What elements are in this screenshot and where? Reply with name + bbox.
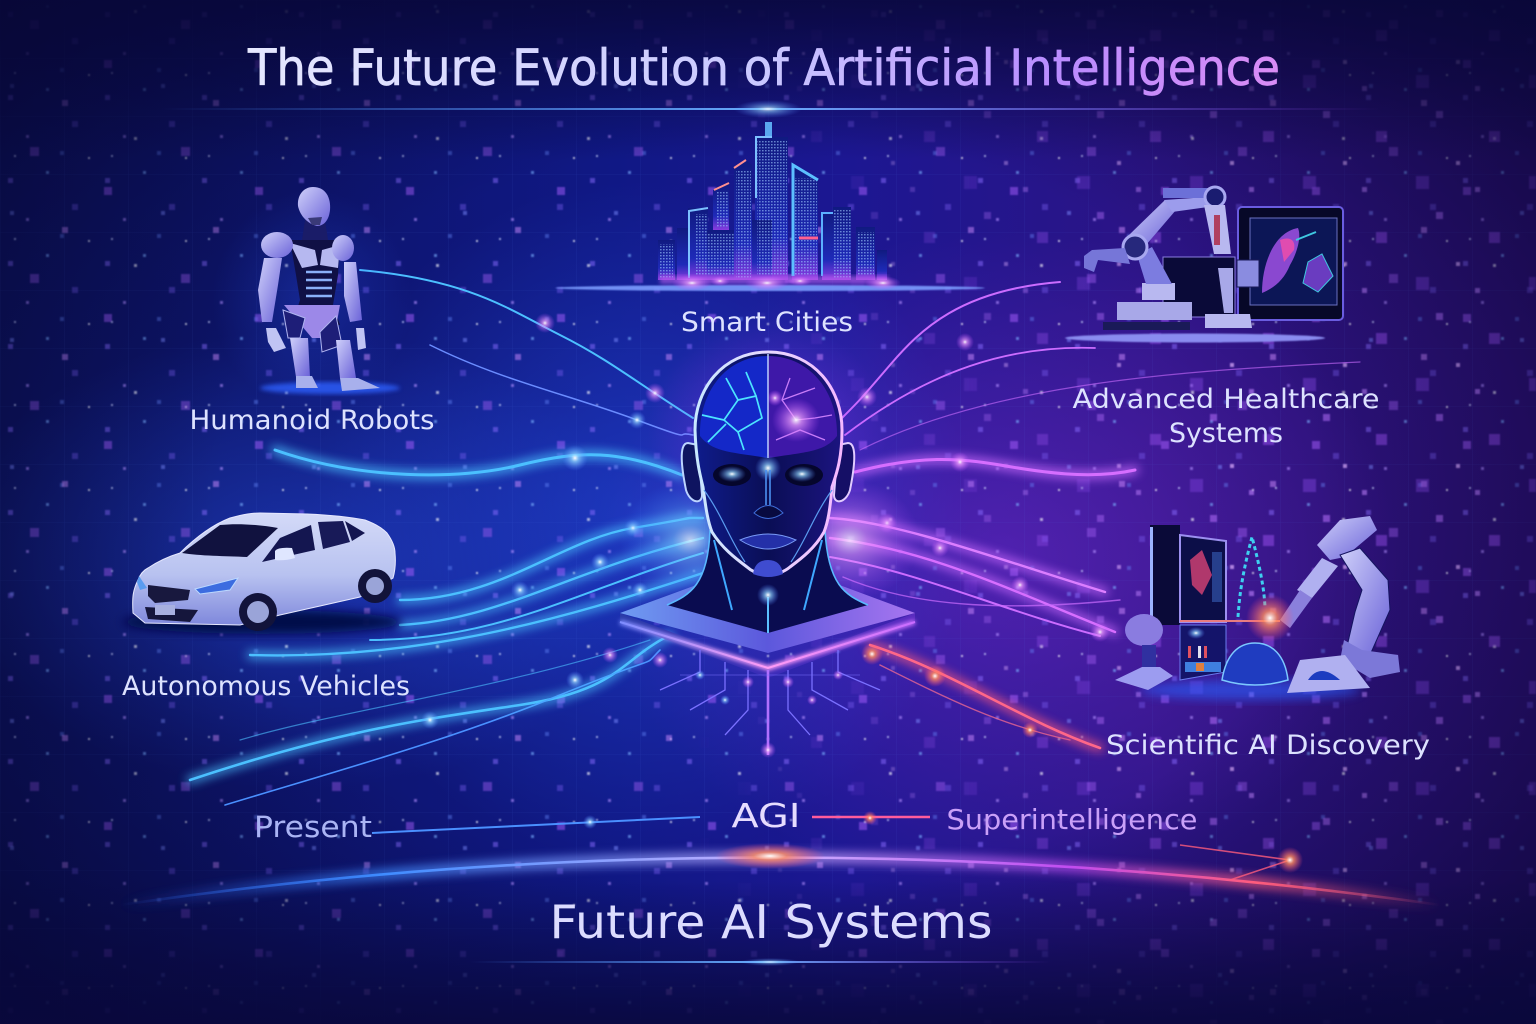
nose and mouth: [740, 470, 796, 549]
street lights: [660, 275, 901, 291]
icon: humanoid robot: [212, 187, 412, 410]
bottom underline: [470, 958, 1050, 966]
timeline label: AGI: AGI: [732, 796, 800, 835]
horizon arc with arrow: [120, 843, 1440, 905]
ears: [682, 443, 702, 501]
chest: [290, 243, 340, 268]
icon: science lab with robot arm: [1115, 516, 1400, 700]
robot arm: [1280, 516, 1400, 693]
timeline label: Present: Present: [254, 810, 372, 844]
platform: [620, 580, 915, 678]
label: Advanced Healthcare Systems: Systems: [1169, 418, 1283, 449]
icon: healthcare robot arm and monitor: [1065, 187, 1343, 342]
face: [695, 352, 842, 574]
label: Scientific AI Discovery: Scientific AI Discovery: [1106, 730, 1430, 761]
central AI head: [620, 320, 920, 678]
circuit traces below head: [660, 650, 880, 758]
connection lines: right purple and pink: [830, 282, 1360, 748]
cyan spire: [1238, 537, 1265, 617]
line nodes: [421, 313, 1110, 738]
label: Smart Cities: Smart Cities: [681, 307, 853, 338]
spark: [1180, 594, 1294, 642]
forehead light: [755, 455, 781, 481]
torso core: [290, 240, 340, 325]
connection lines: left blue: [190, 270, 703, 805]
arms: [258, 258, 282, 322]
monitor: [1238, 207, 1343, 320]
label: Autonomous Vehicles: Autonomous Vehicles: [122, 671, 410, 702]
robot arm: [1084, 187, 1259, 330]
dark cabinet: [1163, 257, 1235, 317]
microscope: [1115, 614, 1173, 690]
shoulders: [261, 232, 293, 258]
bright building edges: [689, 137, 833, 278]
timeline line: [372, 811, 930, 833]
buildings: [658, 122, 887, 280]
label: Advanced Healthcare Systems: Advanced Healthcare: [1072, 384, 1380, 415]
timeline label: Superintelligence: Superintelligence: [946, 803, 1198, 836]
heading: Future AI Systems: Future AI Systems: [550, 895, 992, 949]
head: [298, 187, 330, 226]
chest node: [757, 584, 779, 633]
console: [1180, 625, 1226, 680]
brain: [700, 356, 768, 458]
title underline: [160, 100, 1380, 118]
brain divider: [767, 354, 769, 458]
label: Humanoid Robots: Humanoid Robots: [190, 405, 434, 436]
neck: [302, 220, 328, 240]
head glow: [620, 320, 920, 600]
eyes: [713, 464, 823, 486]
legs: [290, 338, 310, 377]
icon: sedan car: [122, 513, 402, 634]
chin dome: [753, 560, 783, 577]
title: The Future Evolution of Artificial Intelligence: [247, 39, 1280, 97]
pelvis: [284, 305, 340, 338]
glass dome: [1222, 643, 1288, 685]
neck and shoulders: [667, 530, 868, 633]
face contour lines: [704, 490, 832, 562]
tower and monitor: [1150, 525, 1226, 625]
icon: smart city skyline: [555, 122, 985, 291]
lit windows: [660, 140, 874, 278]
